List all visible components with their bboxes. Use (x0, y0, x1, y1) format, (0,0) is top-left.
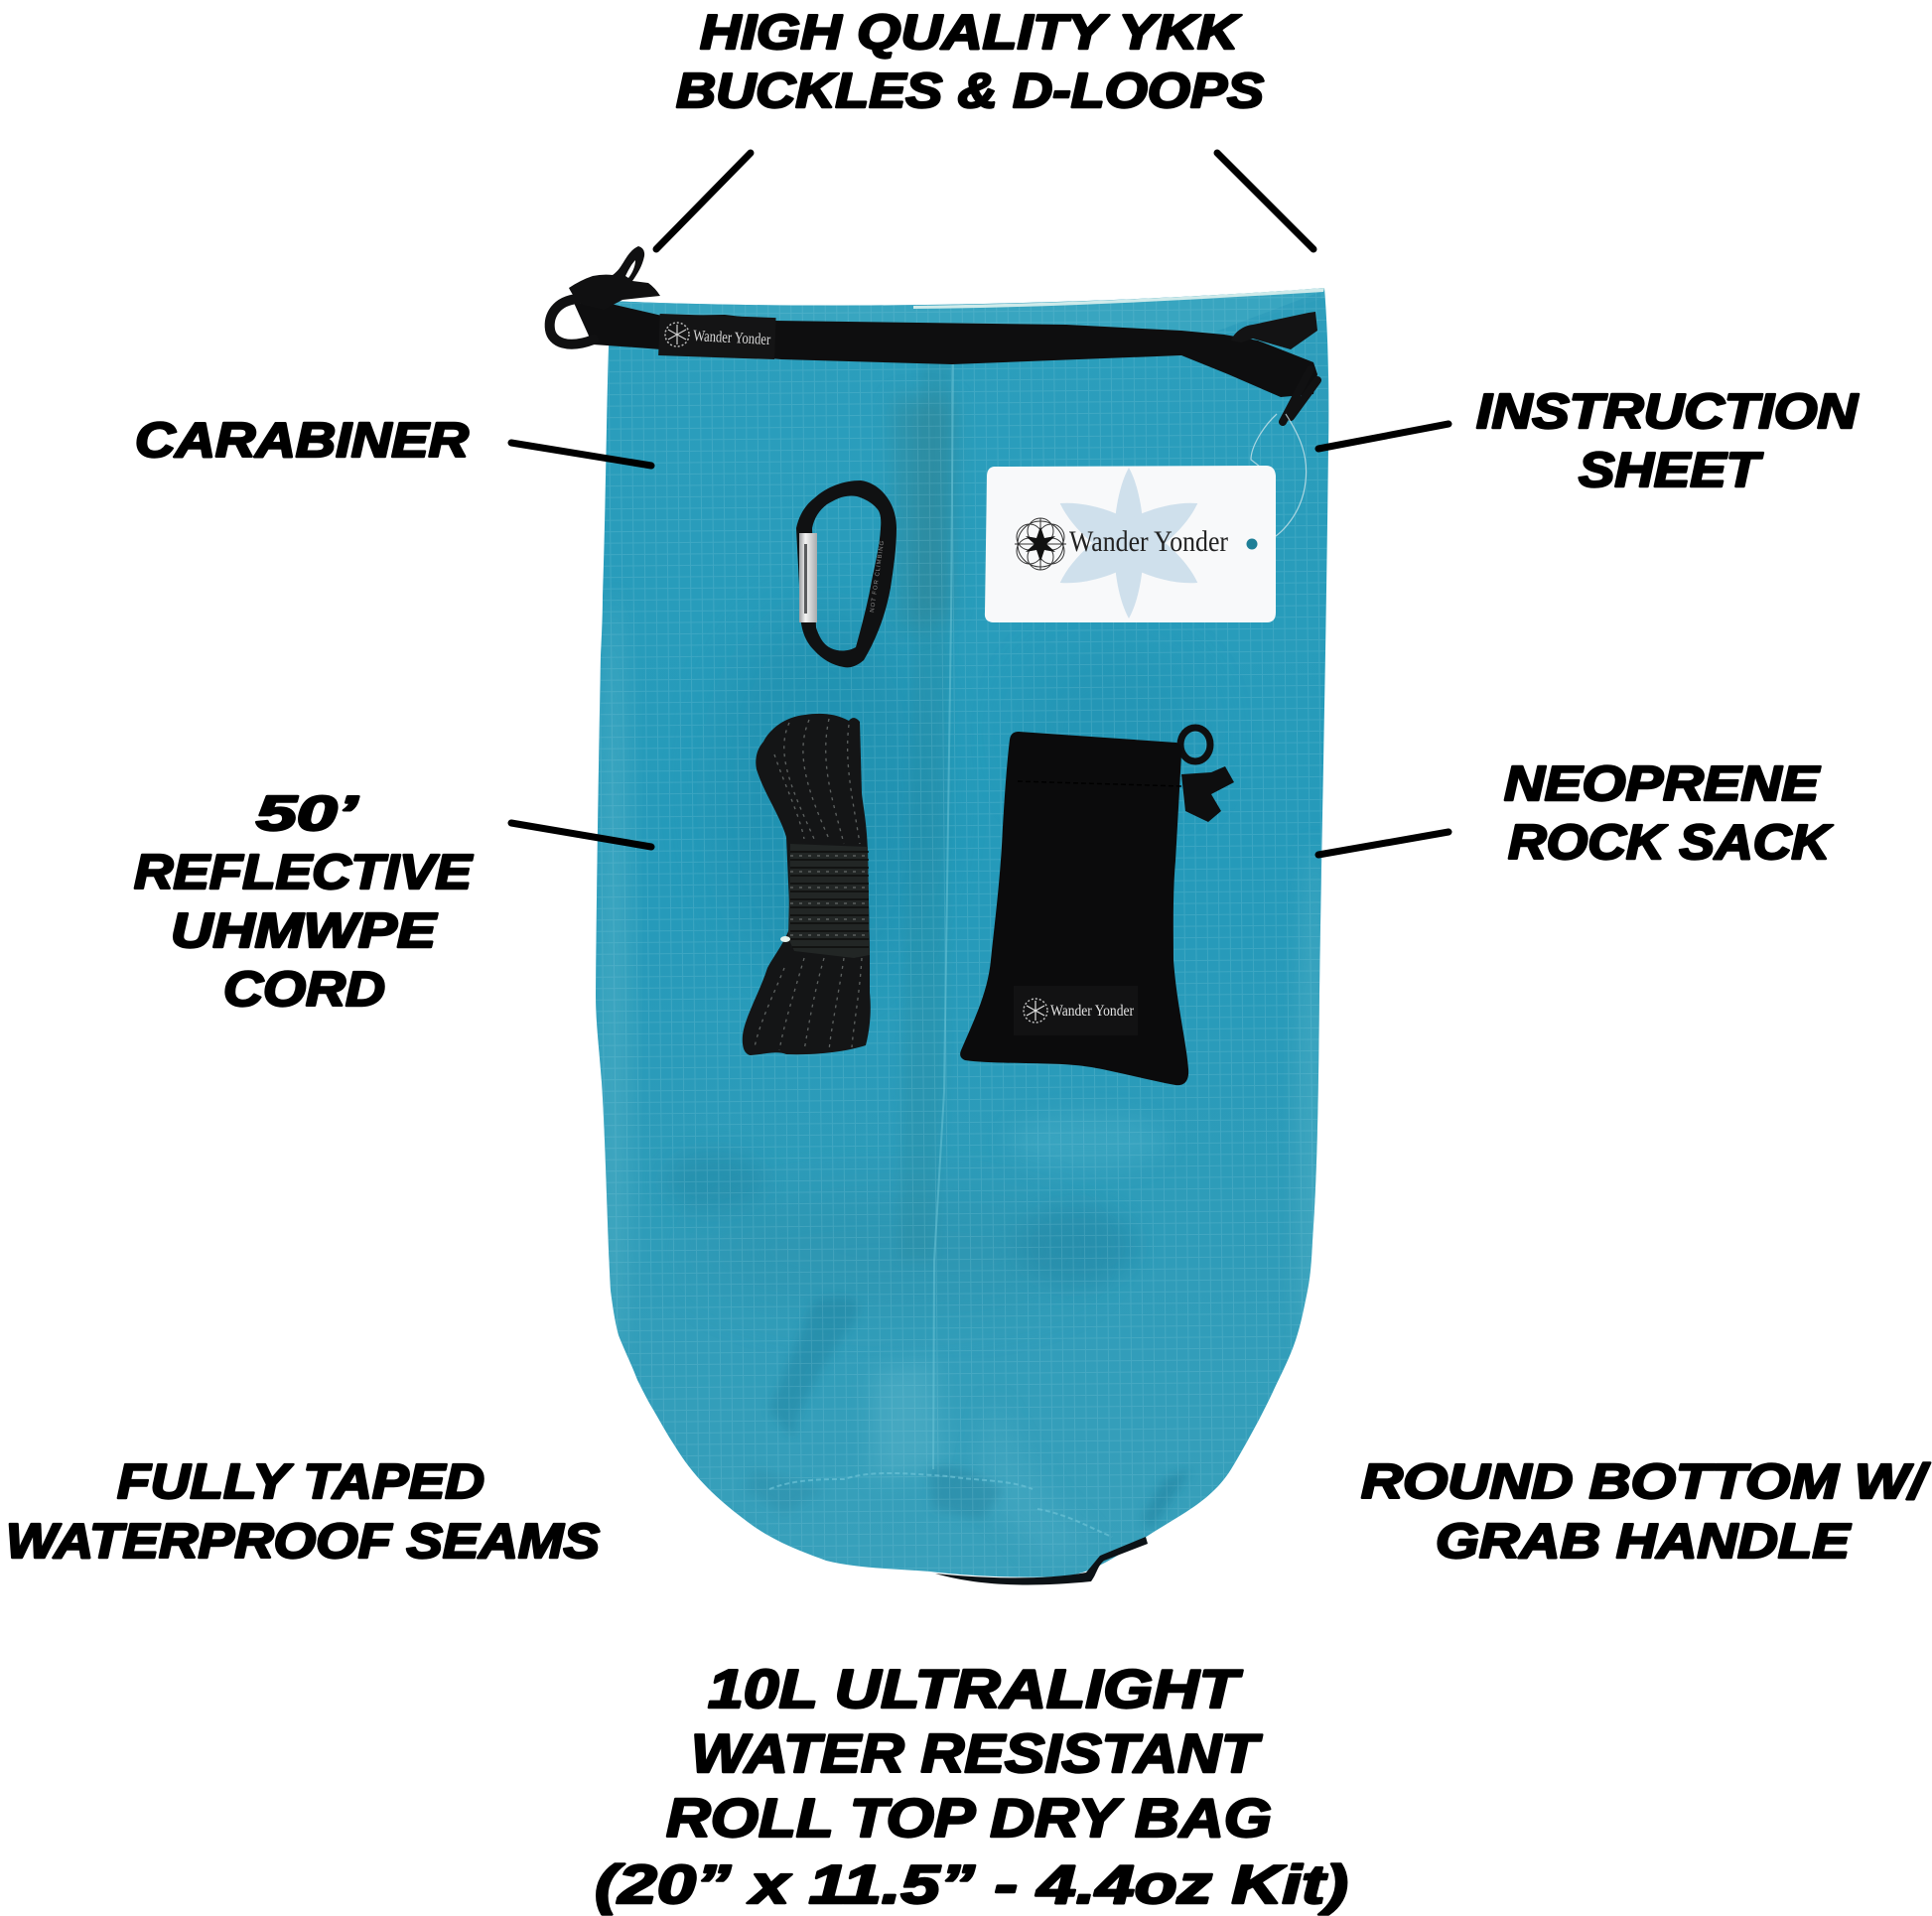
label: instruction sheet: SHEET (1579, 444, 1764, 497)
label: neoprene rock sack: ROCK SACK (1508, 816, 1834, 870)
bag body (596, 288, 1328, 1577)
title: product description: (20” x 11.5” - 4.4oz Kit) (595, 1853, 1348, 1915)
card punch hole (1247, 538, 1257, 550)
sack stitch line (1018, 781, 1181, 786)
callout lines (511, 153, 1449, 855)
title: product description: WATER RESISTANT (691, 1722, 1263, 1784)
grab handle (935, 1537, 1148, 1584)
arrow: left buckle (656, 153, 751, 249)
label: reflective cord: CORD (223, 963, 385, 1017)
label: round bottom: ROUND BOTTOM W/ (1361, 1455, 1930, 1509)
label: neoprene rock sack (1504, 757, 1834, 870)
left buckle, d-loop and ring (550, 246, 660, 344)
cord lock toggle (1181, 766, 1234, 822)
drawcord loop (1180, 728, 1210, 761)
strap brand label: Wander Yonder (693, 328, 771, 348)
carabiner (796, 480, 897, 667)
sack brand label (1014, 986, 1138, 1035)
label: taped seams: FULLY TAPED (117, 1455, 484, 1509)
reflective cord bundle (743, 714, 871, 1055)
carabiner: NOT FOR CLIMBING (870, 540, 886, 613)
card star graphic (1049, 468, 1208, 618)
arrow: right buckle (1217, 153, 1313, 249)
card logo (1015, 518, 1066, 570)
label: reflective cord: UHMWPE (171, 904, 438, 958)
neoprene rock sack (960, 728, 1234, 1085)
instruction sheet tag (985, 414, 1307, 622)
fabric shading and folds (586, 283, 1340, 1593)
sack body (960, 732, 1188, 1085)
title: product description: ROLL TOP DRY BAG (666, 1787, 1272, 1848)
label: instruction sheet (1476, 385, 1860, 497)
label: round bottom (1361, 1455, 1930, 1569)
sack brand label: Wander Yonder (1050, 1003, 1135, 1020)
cord end tip (780, 936, 790, 942)
card brand text: Wander Yonder (1069, 525, 1228, 558)
label: round bottom: GRAB HANDLE (1436, 1515, 1852, 1569)
label: reflective cord: 50’ (256, 787, 359, 841)
right buckle and d-ring (1231, 312, 1317, 422)
arrow: neoprene rock sack (1318, 832, 1449, 855)
heading: buckles and d-loops: BUCKLES & D-LOOPS (676, 65, 1264, 118)
label: taped seams (6, 1455, 600, 1569)
dry bag illustration (550, 246, 1340, 1593)
arrow: instruction sheet (1318, 424, 1449, 449)
light inner lip at bag top (913, 288, 1324, 309)
title: product description (595, 1658, 1348, 1915)
label: taped seams: WATERPROOF SEAMS (6, 1515, 600, 1569)
roll-top strap (574, 303, 1317, 397)
card (985, 466, 1276, 622)
label: instruction sheet: INSTRUCTION (1476, 385, 1860, 439)
title: product description: 10L ULTRALIGHT (708, 1658, 1243, 1719)
strap brand label (658, 314, 776, 359)
heading: buckles and d-loops (676, 6, 1264, 118)
arrow: reflective cord (511, 823, 651, 847)
heading: buckles and d-loops: HIGH QUALITY YKK (700, 6, 1242, 60)
label: reflective cord: REFLECTIVE (134, 846, 473, 899)
label: carabiner: CARABINER (135, 414, 470, 468)
arrow: carabiner (511, 443, 651, 466)
label: reflective cord (134, 787, 473, 1017)
cord wrap band (788, 844, 870, 958)
tag string (1251, 414, 1307, 543)
label: neoprene rock sack: NEOPRENE (1504, 757, 1821, 811)
